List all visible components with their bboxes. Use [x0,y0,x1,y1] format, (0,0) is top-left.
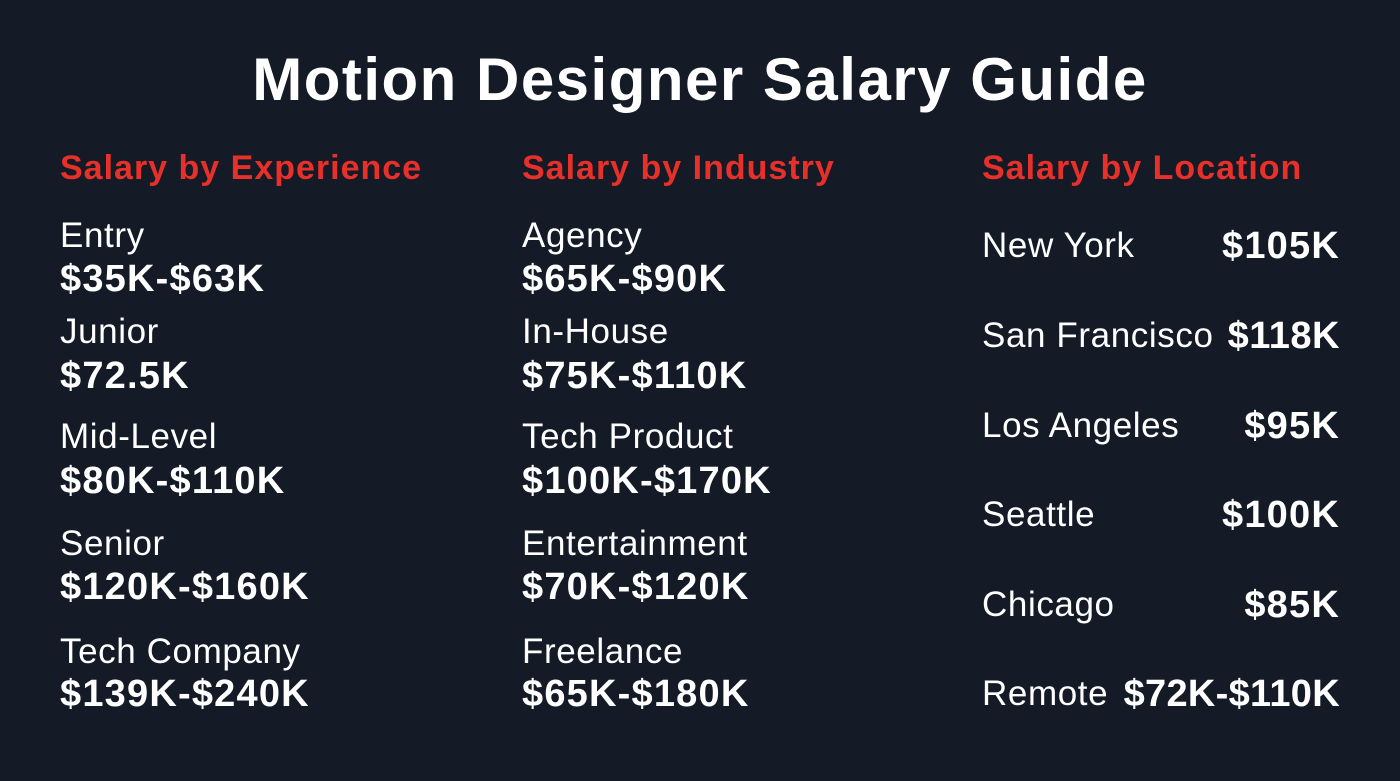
column: location: San Francisco [982,316,1214,355]
column: experience [60,216,310,715]
column: location: $95K [1244,405,1340,447]
column: industry: $65K-$90K [522,258,727,300]
column: industry: Tech Product [522,417,733,456]
column: location [982,225,1340,715]
column: experience: Tech Company [60,632,301,671]
column: location: Remote [982,674,1108,713]
column: industry: $70K-$120K [522,566,749,608]
column: experience: Senior [60,524,165,563]
column: industry: $75K-$110K [522,355,747,397]
column: industry: $100K-$170K [522,460,772,502]
column: location: $105K [1222,225,1340,267]
column: industry [522,216,772,715]
heading: experience: Salary by Experience [60,149,422,187]
column: location: Seattle [982,495,1095,534]
column: experience: $139K-$240K [60,673,310,715]
title: Motion Designer Salary Guide [252,46,1148,113]
column: experience: Entry [60,216,145,255]
column: location: $100K [1222,494,1340,536]
column: location: $72K-$110K [1124,673,1340,715]
column: location: $118K [1228,315,1340,357]
column: location: $85K [1244,584,1340,626]
column: industry: Agency [522,216,642,255]
column: location: New York [982,226,1135,265]
column: experience: Junior [60,312,159,351]
column: location: Chicago [982,585,1115,624]
column: industry: Entertainment [522,524,748,563]
heading: industry: Salary by Industry [522,149,835,187]
column: experience: $80K-$110K [60,460,285,502]
column: industry: In-House [522,312,669,351]
column: experience: $120K-$160K [60,566,310,608]
column: experience: $35K-$63K [60,258,265,300]
column: experience: Mid-Level [60,417,217,456]
heading: location: Salary by Location [982,149,1302,187]
column: industry: $65K-$180K [522,673,749,715]
column: experience: $72.5K [60,355,190,397]
column: location: Los Angeles [982,406,1179,445]
column: industry: Freelance [522,632,683,671]
